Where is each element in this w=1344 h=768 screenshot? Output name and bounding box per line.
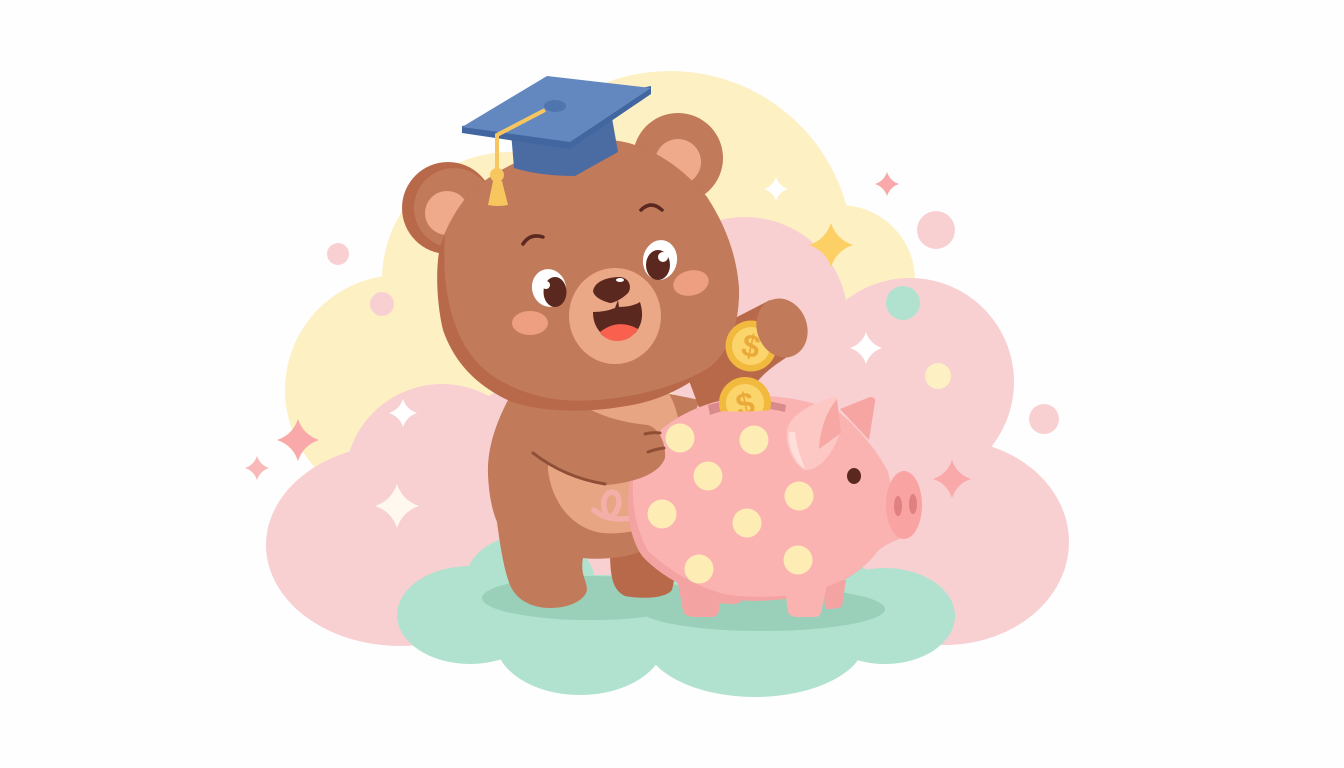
pig far ear — [840, 397, 875, 440]
pig snout — [886, 471, 922, 539]
head face — [444, 140, 739, 401]
pig rear legs — [710, 580, 846, 609]
pig front left leg — [677, 578, 722, 617]
graduation cap — [462, 76, 651, 206]
coin slot — [708, 400, 786, 415]
rear ear — [633, 113, 723, 203]
illustration: bear with graduation cap saving coins in a piggy bank — [245, 71, 1069, 697]
rear ear inner — [655, 139, 701, 185]
pink cloud — [266, 217, 1069, 646]
pig eye — [847, 468, 861, 484]
cap tassel cord — [497, 110, 545, 175]
pig body — [633, 396, 902, 597]
background decorative dots — [327, 211, 1059, 434]
arm and finger lines — [533, 433, 664, 484]
cheeks — [512, 267, 711, 335]
left ear — [402, 162, 494, 254]
pig near ear highlight — [789, 432, 805, 469]
belly tail squiggle — [594, 492, 632, 519]
ground shadows — [482, 576, 885, 631]
bear hugging arm base — [500, 392, 665, 485]
nose highlight — [616, 278, 624, 282]
green cloud ground — [397, 534, 955, 697]
head shadow — [437, 140, 739, 411]
raised arm — [685, 300, 807, 410]
left ear face — [414, 168, 494, 248]
falling coin: $ — [739, 327, 764, 365]
falling coin — [726, 320, 776, 372]
cap top — [462, 76, 651, 142]
pig front right leg — [785, 585, 827, 617]
pig near ear — [787, 397, 840, 470]
pig spots — [648, 424, 814, 584]
bear back leg — [610, 530, 685, 598]
pig body rim — [628, 396, 902, 601]
bear torso and front leg — [488, 380, 700, 608]
cap brim edge — [462, 86, 651, 149]
pig near ear inner — [819, 399, 841, 449]
cap button — [544, 100, 566, 112]
pig nostrils — [894, 494, 917, 516]
tassel skirt — [488, 181, 508, 206]
cap base — [511, 118, 618, 176]
nose — [593, 277, 630, 303]
bear belly — [548, 388, 682, 533]
eyebrows — [523, 205, 662, 244]
bear hand over pig — [533, 424, 665, 485]
tongue — [600, 324, 638, 341]
coin entering slot — [719, 377, 771, 412]
yellow cloud — [285, 71, 915, 505]
eyes — [528, 237, 680, 311]
sparkles — [245, 172, 971, 528]
coin entering slot: $ — [733, 384, 758, 423]
mouth — [593, 300, 642, 340]
piggy bank — [628, 377, 922, 617]
bear back parts — [402, 113, 807, 608]
left ear inner — [425, 191, 469, 235]
bear paw over coin — [748, 291, 816, 365]
muzzle — [569, 268, 661, 364]
tassel knob — [490, 168, 504, 182]
bear head — [437, 140, 739, 411]
